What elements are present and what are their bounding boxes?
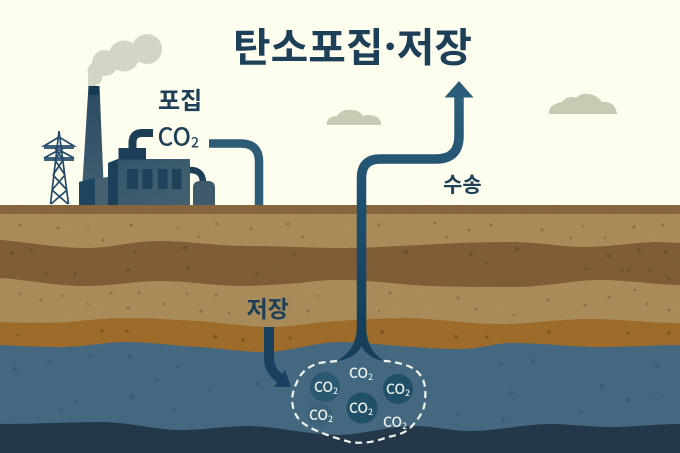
transport pipe with arrow <box>337 81 474 361</box>
CO2 molecule labels: CO <box>386 379 405 399</box>
smoke plume <box>88 34 162 87</box>
transport label: 수송 <box>443 169 482 199</box>
sky background <box>0 0 680 206</box>
arrow head <box>444 81 474 98</box>
low block <box>79 176 113 205</box>
side tank <box>193 181 215 205</box>
CO2 bubbles <box>307 363 413 427</box>
CO2 molecule labels: 2 <box>333 385 338 397</box>
storage arrow <box>269 327 291 387</box>
CO2 molecule labels: CO <box>349 398 368 418</box>
capture label: 포집 <box>158 81 202 116</box>
CO2 capture label: 2 <box>191 132 199 152</box>
storage label: 저장 <box>246 290 289 324</box>
storage reservoir <box>292 361 425 443</box>
CO2 molecule labels: 2 <box>368 371 373 383</box>
grain texture <box>0 205 680 453</box>
cloud: right <box>549 94 617 114</box>
CO2 molecule labels: CO <box>349 363 368 383</box>
pipe body <box>362 96 459 345</box>
CO2 capture label: CO <box>158 118 191 154</box>
layer: lower sand <box>0 278 680 340</box>
layer: brown soil <box>0 240 680 300</box>
CO2 molecule labels: CO <box>309 405 328 425</box>
side pipe <box>190 170 203 183</box>
chimney <box>82 86 104 182</box>
CO2 molecule labels: 2 <box>328 413 333 425</box>
reservoir dashed boundary <box>292 361 425 443</box>
layer: blue saline aquifer <box>0 342 680 440</box>
factory windows <box>127 169 182 189</box>
layer: light sand <box>0 214 680 254</box>
roof box <box>118 148 146 160</box>
layer: ochre <box>0 318 680 365</box>
layer: bedrock <box>0 422 680 453</box>
CO2 molecule labels <box>309 363 410 432</box>
title: 탄소포집·저장 <box>233 16 472 74</box>
CO2 molecule labels: 2 <box>402 420 407 432</box>
exhaust pipe <box>132 133 153 148</box>
main building <box>108 159 190 205</box>
pipe flare <box>337 328 384 361</box>
CO2 molecule labels: 2 <box>368 406 373 418</box>
factory <box>79 86 215 205</box>
underground strata <box>0 205 680 453</box>
dark specks <box>10 246 671 342</box>
icon: power pylon <box>44 131 74 204</box>
captured CO2 pipe <box>209 144 259 205</box>
cloud: left <box>327 110 381 125</box>
CO2 molecule labels: 2 <box>405 387 410 399</box>
layer: topsoil <box>0 205 680 215</box>
CO2 molecule labels: CO <box>383 412 402 432</box>
aquifer specks <box>13 355 659 421</box>
CO2 molecule labels: CO <box>314 377 333 397</box>
soil specks <box>18 222 670 316</box>
